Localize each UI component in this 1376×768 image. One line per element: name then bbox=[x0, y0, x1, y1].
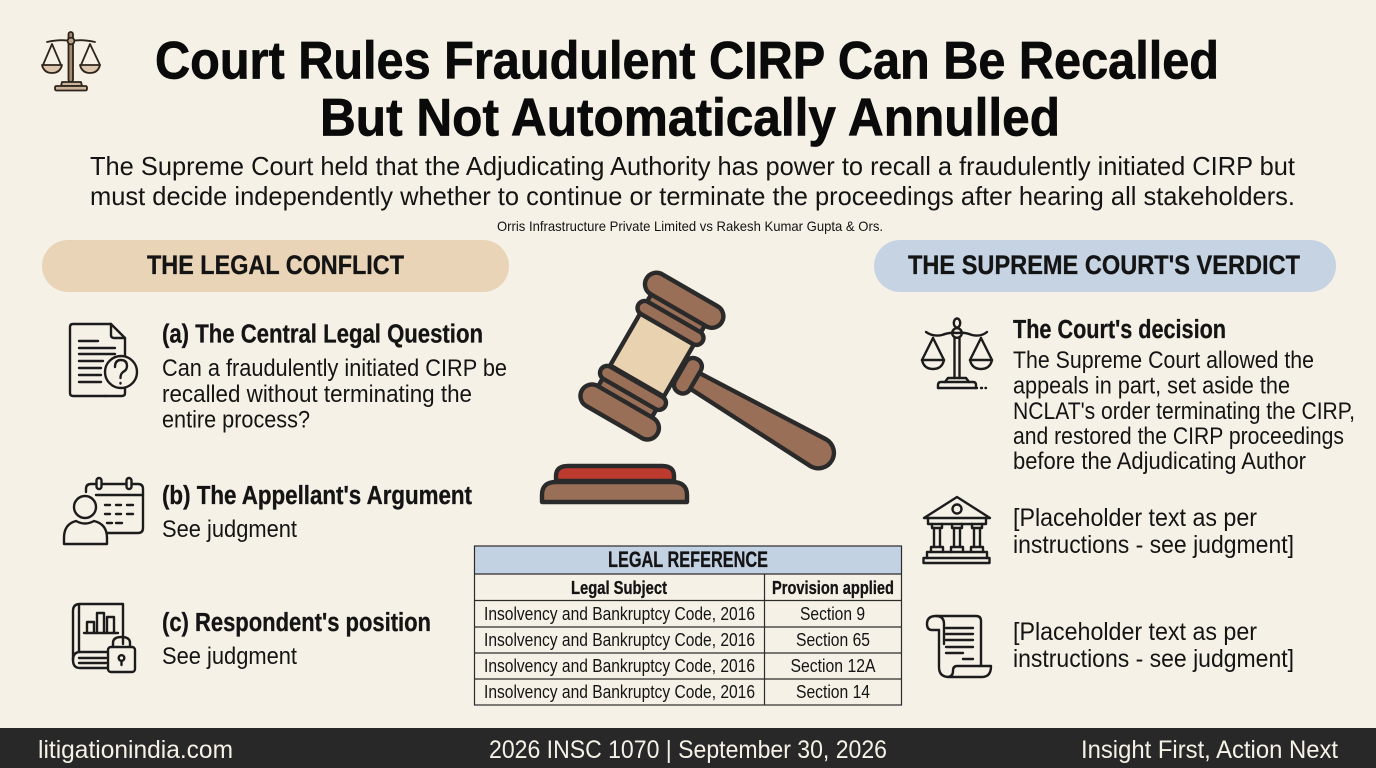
heading: the legal conflict: THE LEGAL CONFLICT bbox=[147, 250, 404, 280]
text: the central legal question: recalled without terminating the bbox=[162, 381, 472, 408]
table: legal reference: Insolvency and Bankruptcy Code, 2016 bbox=[484, 656, 755, 676]
text: the central legal question: entire process? bbox=[162, 406, 310, 434]
table: legal reference: Insolvency and Bankruptcy Code, 2016 bbox=[484, 604, 755, 624]
footer bar: 2026 INSC 1070 | September 30, 2026 bbox=[489, 736, 887, 764]
footer bar: litigationindia.com bbox=[38, 736, 233, 764]
text: the central legal question: (a) The Central Legal Question bbox=[162, 320, 483, 348]
text: the court's decision bbox=[1013, 316, 1355, 475]
text: respondent's position: (c) Respondent's position bbox=[162, 609, 431, 637]
sound block bbox=[542, 466, 687, 502]
heading: the supreme court's verdict: THE SUPREME COURT'S VERDICT bbox=[908, 250, 1300, 280]
text: the appellant's argument: See judgment bbox=[162, 516, 297, 543]
text: second placeholder: [Placeholder text as per bbox=[1013, 618, 1257, 646]
table: legal reference: Section 65 bbox=[796, 630, 870, 650]
icon: scroll bbox=[927, 616, 991, 677]
table: legal reference: Legal Subject bbox=[571, 578, 667, 598]
text: respondent's position: See judgment bbox=[162, 643, 297, 670]
text: the court's decision: before the Adjudicating Author bbox=[1013, 448, 1306, 475]
text: the appellant's argument bbox=[162, 482, 472, 543]
table: legal reference: LEGAL REFERENCE bbox=[608, 547, 768, 572]
title: Court Rules Fraudulent CIRP Can Be Recalled bbox=[155, 32, 1219, 90]
case name: Orris Infrastructure Private Limited vs Rakesh Kumar Gupta & Ors. bbox=[497, 218, 883, 234]
table: legal reference: Insolvency and Bankruptcy Code, 2016 bbox=[484, 682, 755, 702]
text: the central legal question: Can a fraudulently initiated CIRP be bbox=[162, 355, 507, 382]
text: respondent's position bbox=[162, 609, 431, 670]
text: the court's decision: The Supreme Court allowed the bbox=[1013, 347, 1314, 374]
text: the central legal question bbox=[162, 320, 507, 434]
table: legal reference: Insolvency and Bankruptcy Code, 2016 bbox=[484, 630, 755, 650]
text: the court's decision: appeals in part, set aside the bbox=[1013, 372, 1290, 400]
icon: scales bbox=[922, 318, 992, 388]
panel: the supreme court's verdict bbox=[874, 240, 1355, 677]
gavel bbox=[576, 269, 870, 526]
footer bar bbox=[0, 728, 1376, 768]
table: legal reference: Section 9 bbox=[800, 604, 865, 624]
table: legal reference: Section 12A bbox=[790, 656, 876, 676]
text: second placeholder: instructions - see judgment] bbox=[1013, 645, 1294, 673]
subtitle bbox=[90, 151, 1296, 211]
icon: scales of justice bbox=[42, 32, 100, 90]
icon: person with calendar bbox=[64, 478, 143, 544]
text: first placeholder: [Placeholder text as per bbox=[1013, 504, 1257, 532]
footer bar: Insight First, Action Next bbox=[1081, 736, 1338, 764]
text: the appellant's argument: (b) The Appellant's Argument bbox=[162, 482, 472, 510]
text: the court's decision: The Court's decision bbox=[1013, 316, 1226, 344]
title: But Not Automatically Annulled bbox=[320, 88, 1060, 148]
table: legal reference: Provision applied bbox=[772, 578, 894, 598]
table: legal reference bbox=[474, 546, 902, 705]
text: first placeholder bbox=[1013, 504, 1294, 559]
text: second placeholder bbox=[1013, 618, 1294, 673]
heading: the legal conflict bbox=[42, 240, 509, 292]
table: legal reference: Section 14 bbox=[796, 682, 870, 702]
illustration: gavel and sound block bbox=[542, 269, 870, 526]
title bbox=[155, 32, 1219, 148]
icon: document with question mark bbox=[70, 324, 137, 396]
subtitle: must decide independently whether to continue or terminate the proceedings after hearing all stakeholders. bbox=[90, 181, 1295, 211]
panel: the legal conflict bbox=[42, 240, 509, 672]
icon: book with chart and lock bbox=[73, 604, 135, 672]
subtitle: The Supreme Court held that the Adjudicating Authority has power to recall a fraudulently initiated CIRP but bbox=[90, 151, 1296, 181]
icon: courthouse bbox=[924, 497, 990, 563]
text: first placeholder: instructions - see judgment] bbox=[1013, 531, 1294, 559]
heading: the supreme court's verdict bbox=[874, 240, 1336, 292]
